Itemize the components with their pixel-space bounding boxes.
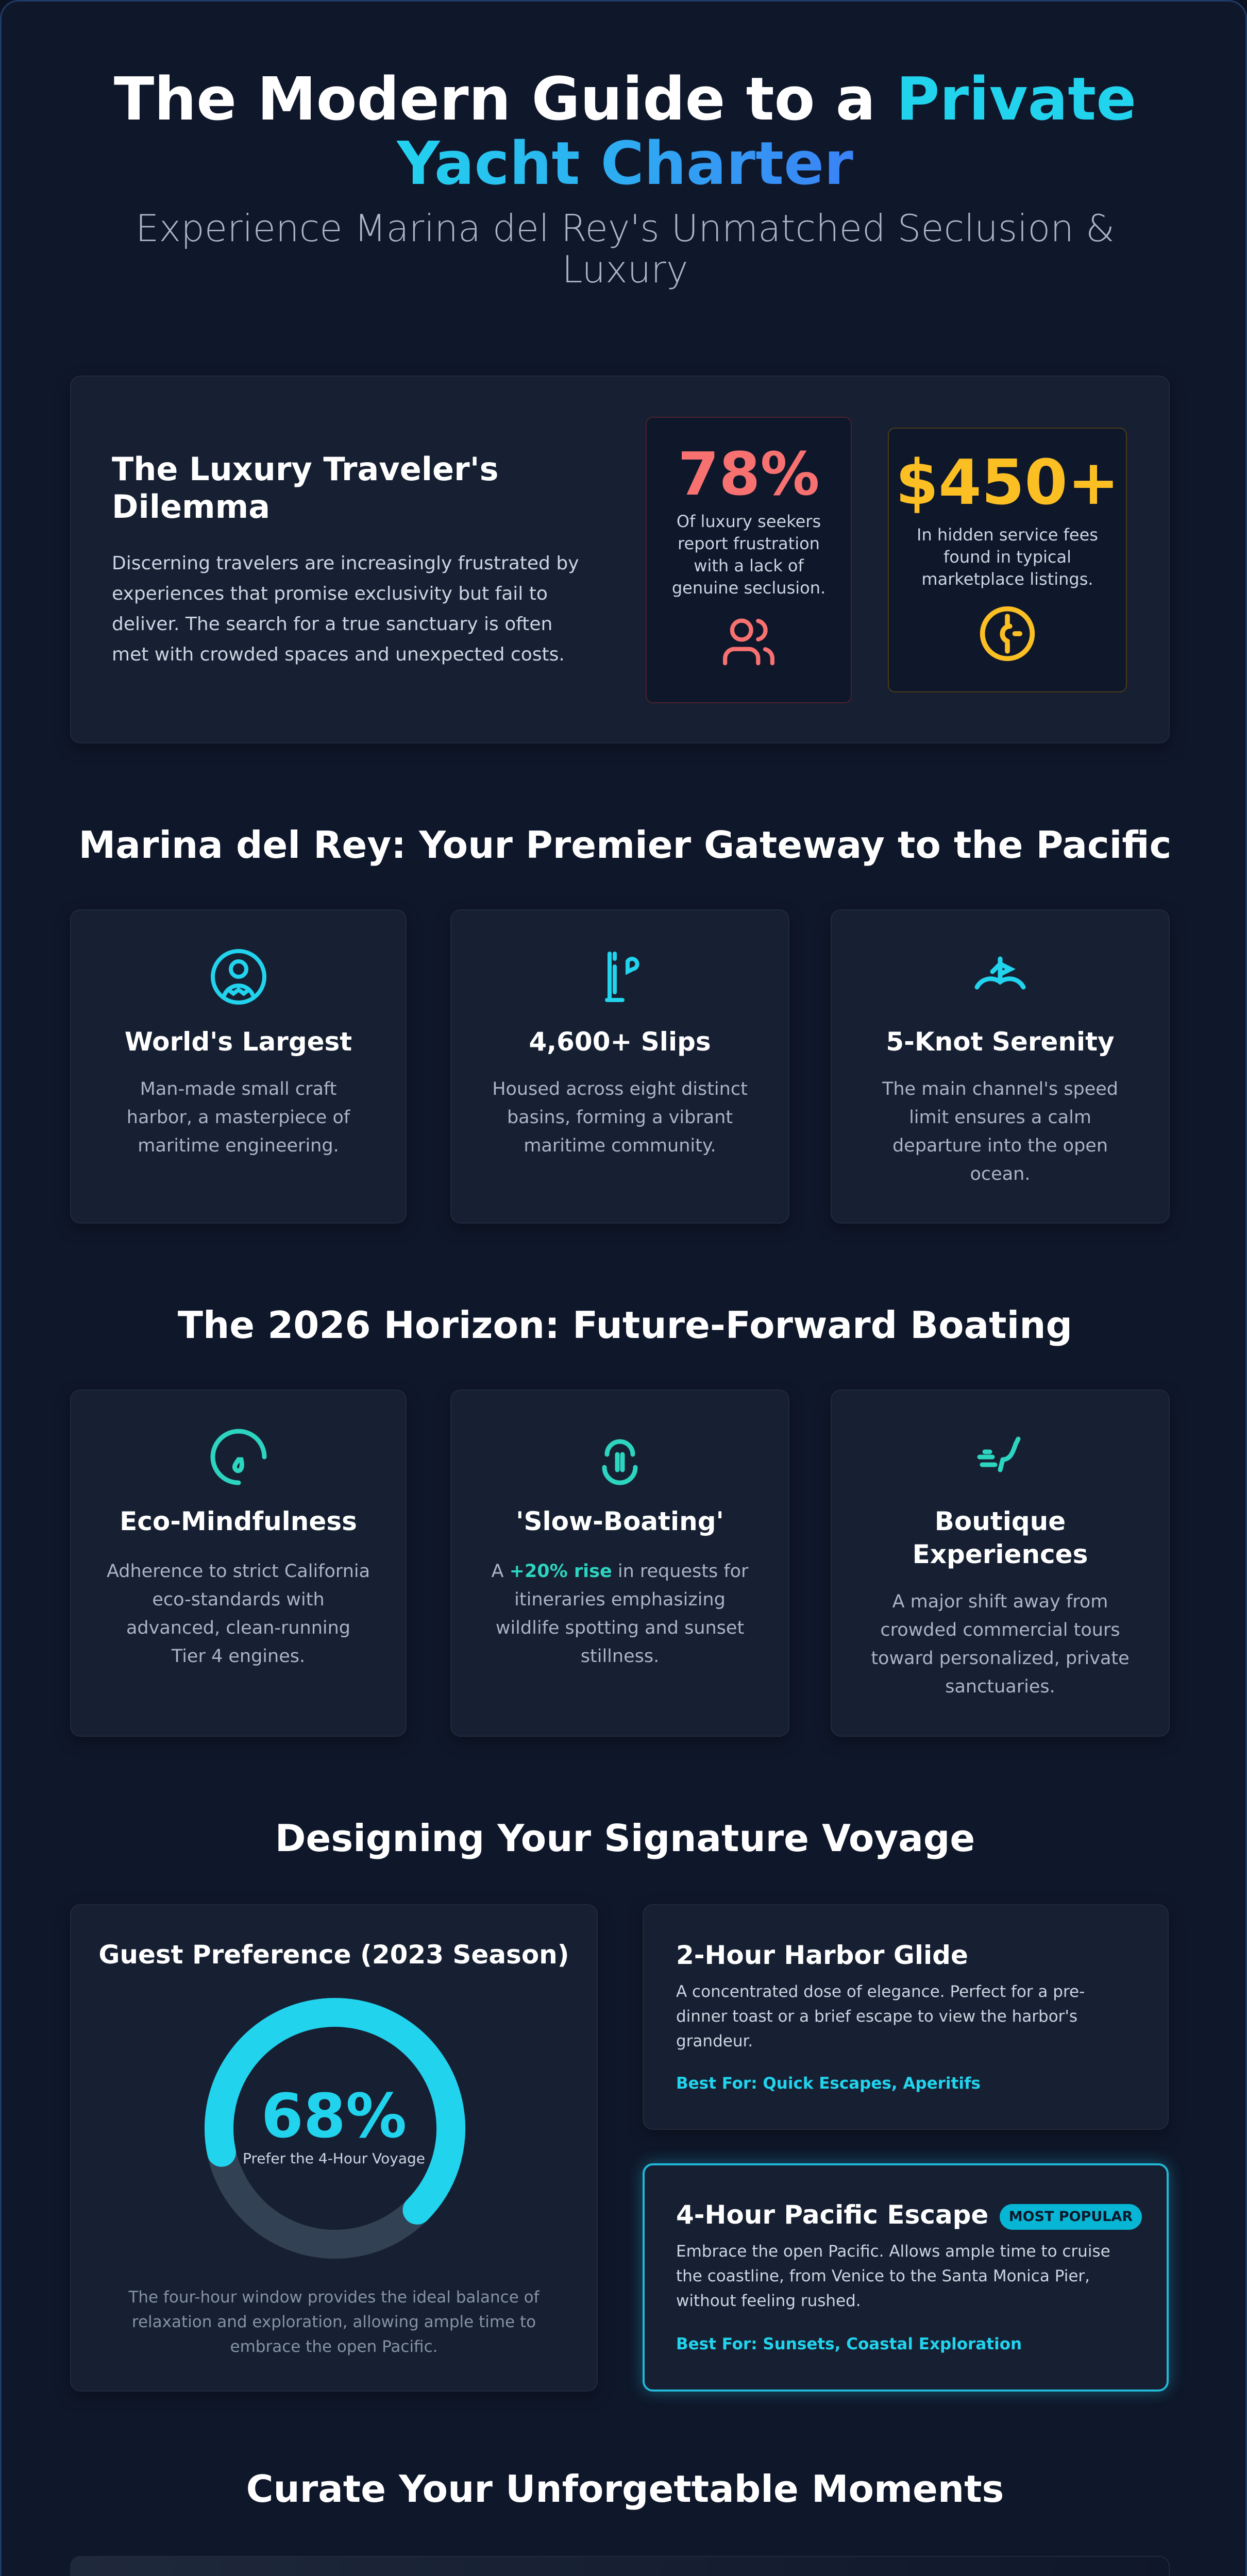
text: dilemma body: Discerning travelers are increasingly frustrated by experiences that promise exclusivity but fail to deliver. The search for a true sanctuary is often met with crowded spaces and unexpected costs. [112, 553, 579, 665]
heading: curate moments: Curate Your Unforgettable Moments [246, 2467, 1004, 2511]
panel: guest preference chart: Prefer the 4-Hour Voyage [243, 2150, 425, 2167]
card: slips: 4,600+ Slips [529, 1027, 711, 1057]
panel: luxury traveler's dilemma [70, 376, 1170, 743]
card: 2-hour: A concentrated dose of elegance. Perfect for a pre-dinner toast or a brief escape to view the harbor's grandeur. [676, 1982, 1085, 2050]
text: caption: The four-hour window provides the ideal balance of relaxation and exploration, allowing ample time to embrace the open Pacific. [128, 2288, 540, 2356]
stat: 78% [646, 417, 852, 703]
card: boutique [831, 1389, 1170, 1737]
card: world's largest [70, 909, 407, 1224]
card: eco: eco-standards with [152, 1589, 325, 1610]
stat: 78%: Of luxury seekers report frustration with a lack of genuine seclusion. [672, 512, 825, 598]
icon: coin [980, 606, 1035, 662]
heading: guest preference: Guest Preference (2023 Season) [98, 1940, 569, 1970]
card: eco [70, 1389, 407, 1737]
icon: users [723, 618, 774, 666]
icon: boutique [977, 1436, 1020, 1472]
card: 2-hour [643, 1904, 1169, 2130]
icon: slow boat [602, 1439, 638, 1485]
stat: $450+: In hidden service fees found in typical marketplace listings. [917, 525, 1098, 589]
card: 5-knot [831, 909, 1170, 1224]
card: 4-hour most popular: MOST POPULAR [1009, 2208, 1133, 2225]
heading: gateway: Marina del Rey: Your Premier Gateway to the Pacific [79, 823, 1171, 867]
title: Yacht Charter [397, 129, 853, 198]
card: slips [450, 909, 789, 1224]
panel: golden hour [70, 2556, 1170, 2576]
card: world's largest: Man-made small craft harbor, a masterpiece of maritime engineering. [127, 1079, 350, 1156]
icon: eco leaf circle [210, 1429, 267, 1485]
card: slow-boating: A +20% rise in requests for itineraries emphasizing wildlife spotting and sunset stillness. [492, 1561, 748, 1667]
card: 4-hour most popular [643, 2163, 1169, 2392]
heading: signature voyage: Designing Your Signature Voyage [275, 1817, 975, 1860]
icon: dock [605, 952, 639, 1002]
subtitle: Experience Marina del Rey's Unmatched Seclusion & Luxury [136, 207, 1115, 291]
title [114, 65, 1136, 198]
icon: harbor circle [211, 949, 266, 1005]
card: world's largest: World's Largest [125, 1027, 352, 1057]
title: The Modern Guide to a Private [114, 65, 1136, 134]
stat: 68%: 68% [261, 2080, 407, 2151]
donut chart: 68% [204, 1998, 466, 2259]
card: slips: Housed across eight distinct basins, forming a vibrant maritime community. [492, 1079, 748, 1156]
stat: $450+ [888, 428, 1127, 692]
panel: guest preference chart [70, 1904, 598, 2392]
card: 4-hour most popular: Embrace the open Pacific. Allows ample time to cruise the coastline, from Venice to the Santa Monica Pier, without feeling rushed. [676, 2242, 1110, 2310]
card: 2-hour: Best For: Quick Escapes, Aperitifs [676, 2074, 981, 2093]
card: 5-knot: The main channel's speed limit ensures a calm departure into the open ocean. [882, 1079, 1118, 1184]
icon: sail [975, 956, 1025, 989]
card: 2-hour: 2-Hour Harbor Glide [676, 1940, 968, 1970]
heading: dilemma: The Luxury Traveler's Dilemma [112, 450, 499, 526]
heading: 2026 horizon: The 2026 Horizon: Future-Forward Boating [178, 1303, 1072, 1347]
card: 4-hour most popular: Best For: Sunsets, Coastal Exploration [676, 2335, 1022, 2353]
card: eco: advanced, clean-running [126, 1618, 350, 1638]
stat: $450+: $450+ [896, 447, 1119, 519]
card: boutique: A major shift away from crowded commercial tours toward personalized, private sanctuaries. [871, 1591, 1130, 1697]
card: 5-knot: 5-Knot Serenity [886, 1027, 1115, 1057]
card: eco: Eco-Mindfulness [120, 1506, 357, 1536]
card: boutique: Experiences [913, 1539, 1088, 1569]
card: slow-boating [450, 1389, 789, 1737]
stat: 78%: 78% [678, 440, 820, 509]
card: slow-boating: 'Slow-Boating' [516, 1506, 724, 1536]
card: eco: Adherence to strict California [107, 1561, 370, 1582]
card: eco: Tier 4 engines. [172, 1646, 305, 1667]
card: boutique: Boutique [935, 1506, 1066, 1536]
card: 4-hour most popular: 4-Hour Pacific Escape [676, 2200, 988, 2230]
